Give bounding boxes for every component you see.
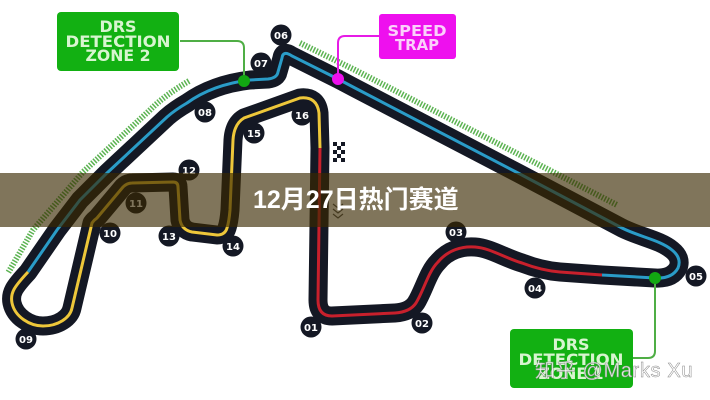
turn numbers: 01: [304, 323, 318, 334]
title band: [0, 173, 710, 227]
DRS detection zone 1 label: [510, 272, 661, 388]
turn numbers: 06: [274, 31, 288, 42]
turn numbers: 13: [162, 232, 176, 243]
turn numbers: 02: [415, 319, 429, 330]
turn numbers: 03: [449, 228, 463, 239]
turn numbers: 10: [103, 229, 117, 240]
DRS detection zone 1 label: DETECTION: [518, 350, 624, 369]
chequered flag: [333, 142, 345, 162]
turn numbers: 09: [19, 335, 33, 346]
turn numbers: [16, 24, 706, 350]
turn numbers: 15: [247, 129, 261, 140]
speed trap label: SPEED: [388, 22, 446, 40]
speed trap label: [332, 14, 456, 85]
turn numbers: 04: [528, 284, 542, 295]
turn numbers: 16: [295, 111, 309, 122]
track outline: [12, 53, 679, 326]
turn numbers: 14: [226, 242, 240, 253]
DRS activation strips: [8, 43, 617, 273]
DRS detection zone 2 label: [57, 12, 250, 87]
direction chevrons: [333, 204, 343, 218]
DRS detection zone 1 label: ZONE 1: [538, 364, 604, 383]
turn numbers: 12: [182, 166, 196, 177]
DRS detection zone 2 label: ZONE 2: [86, 46, 150, 65]
turn numbers: 08: [198, 108, 212, 119]
turn numbers: 07: [254, 59, 268, 70]
turn numbers: 11: [129, 199, 143, 210]
speed trap label: TRAP: [395, 36, 439, 54]
watermark: 知乎 @Marks Xu: [535, 360, 693, 382]
DRS detection zone 2 label: DRS: [100, 17, 136, 36]
turn numbers: 05: [689, 272, 703, 283]
DRS detection zone 2 label: DETECTION: [66, 32, 170, 51]
sector 2 blue line: [28, 53, 679, 278]
title: 12月27日热门赛道: [253, 186, 459, 214]
sector 3 yellow line: [12, 98, 320, 326]
DRS detection zone 1 label: DRS: [552, 335, 590, 354]
sector 1 red line: [318, 148, 602, 316]
